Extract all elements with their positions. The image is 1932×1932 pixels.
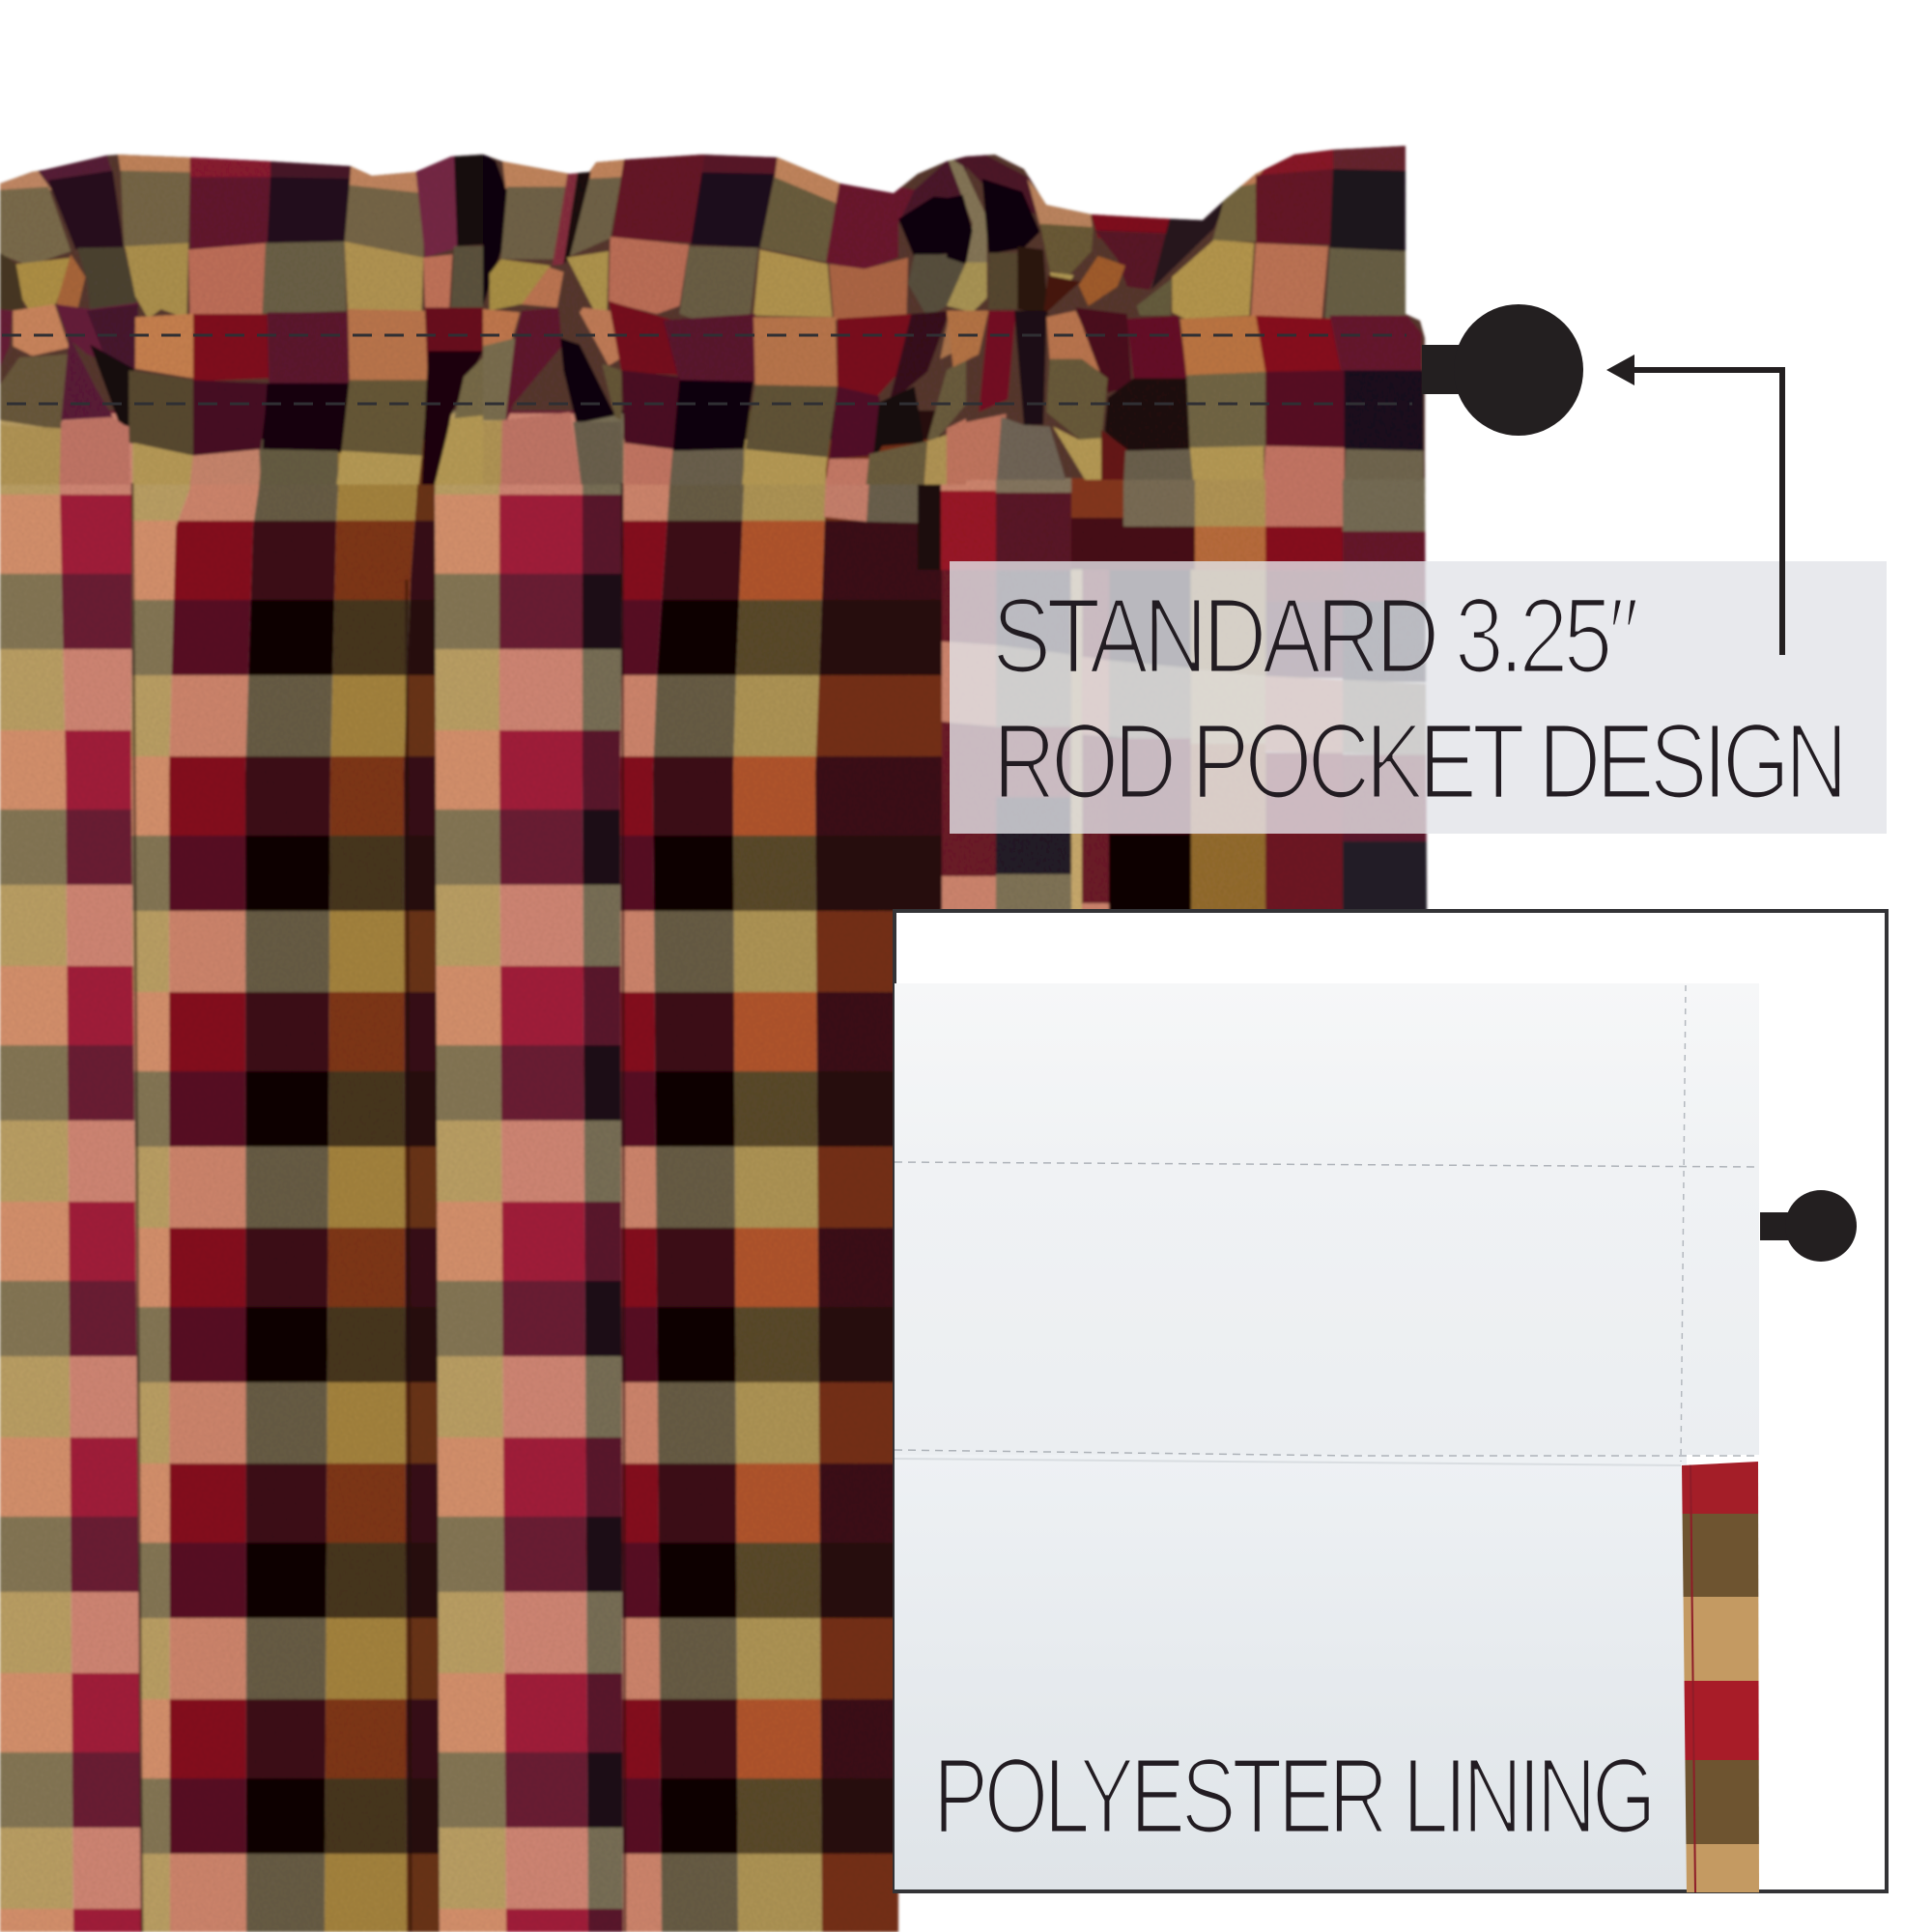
panel: checked curtain photograph — [0, 143, 1430, 1932]
lining label: POLYESTER LINING — [933, 1737, 1652, 1856]
plaid edge of curtain face fabric — [1682, 1462, 1759, 1892]
icon: curtain rod with round finial — [1422, 304, 1583, 436]
white lining fabric — [895, 983, 1759, 1889]
lower rod pocket stitch line — [7, 402, 1412, 406]
inset frame — [895, 911, 1887, 1891]
right curtain section behind the callout — [918, 478, 1430, 918]
callout: rod pocket label panel — [950, 561, 1887, 834]
gathered header, right section — [947, 143, 1423, 480]
fold shadow lines — [132, 483, 625, 1932]
gathered header, middle section — [483, 152, 966, 485]
curtain body: lower plaid columns — [0, 145, 1430, 1932]
upper rod pocket stitch line — [2, 334, 1406, 336]
gathered header, left section — [0, 152, 483, 485]
callout text line one: STANDARD 3.25″ — [992, 577, 1637, 696]
arrow pointing to the rod — [1606, 355, 1782, 655]
icon: small rod with round finial — [1760, 1190, 1857, 1262]
panel: polyester lining inset — [895, 911, 1887, 1892]
woven fabric texture — [0, 145, 1430, 1932]
